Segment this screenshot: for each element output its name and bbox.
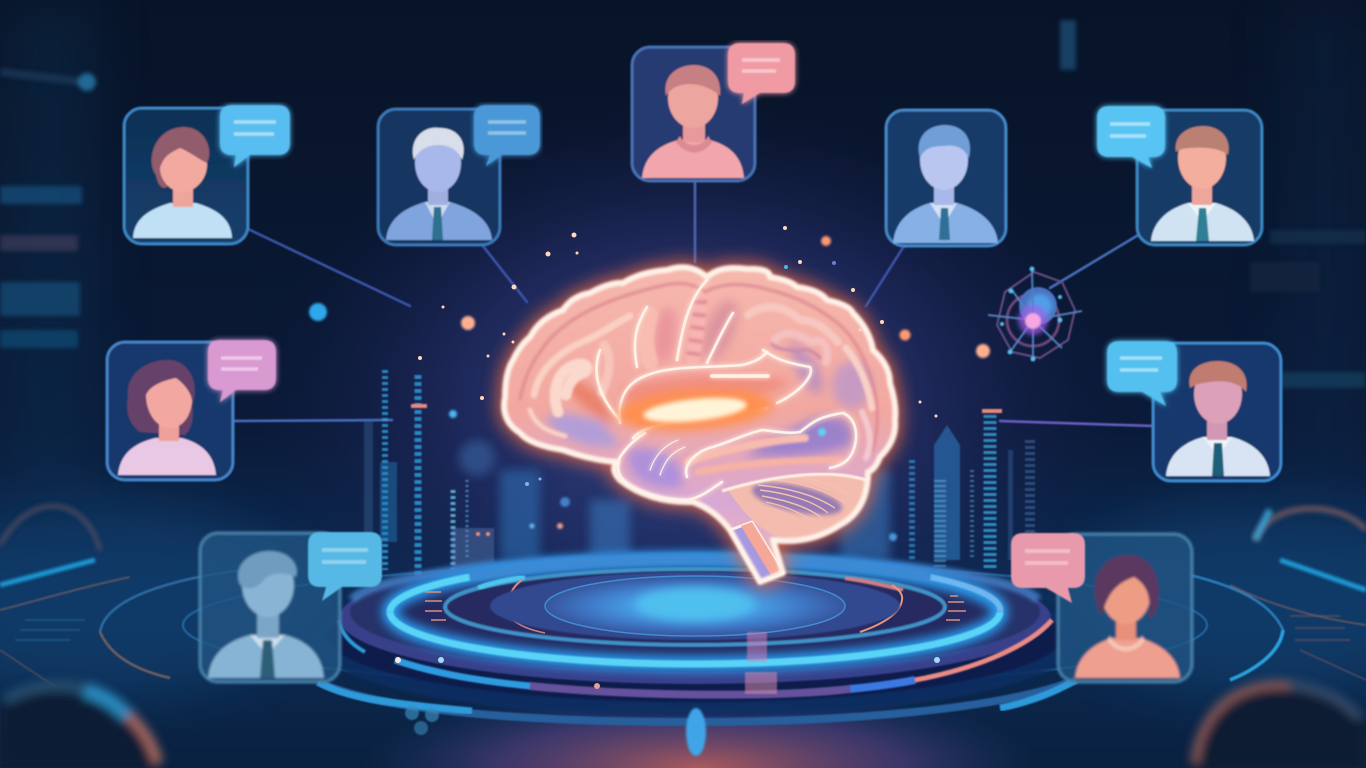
inner ring bbox=[445, 569, 945, 645]
person card 6: woman mid left bbox=[107, 340, 276, 480]
cerebellum striations bbox=[722, 474, 866, 539]
purple and coral shading bbox=[545, 295, 872, 488]
central bright core bbox=[616, 385, 774, 435]
person card 3: top center pink bbox=[632, 43, 795, 181]
speech bubble bbox=[474, 105, 540, 166]
person card 1: woman top left bbox=[124, 105, 290, 244]
speech bubble bbox=[1011, 533, 1085, 603]
person card 9: blurred woman bottom right bbox=[1011, 533, 1192, 682]
data skyline left bbox=[364, 370, 890, 590]
speech bubble bbox=[208, 340, 276, 402]
data skyline right bbox=[912, 409, 1030, 570]
floating particles bbox=[309, 226, 990, 541]
speech bubble bbox=[728, 43, 795, 104]
accent segments bbox=[338, 620, 1052, 695]
tick marks bbox=[425, 592, 966, 620]
foreground blurred corner shapes bbox=[0, 685, 1366, 768]
main glowing ring bbox=[390, 560, 1000, 664]
person card 7: man mid right bbox=[1107, 341, 1281, 481]
connector lines from cards to brain bbox=[234, 181, 1154, 426]
background decoration: blurred left and right interface bars bbox=[0, 20, 1366, 388]
background rings bbox=[0, 506, 1366, 690]
brain bbox=[504, 267, 895, 582]
speech bubble bbox=[220, 105, 290, 167]
person card 2: man with grey hair bbox=[378, 105, 540, 245]
speech bubble bbox=[1097, 106, 1165, 168]
cortex folds bbox=[530, 300, 872, 472]
pink light column bbox=[747, 632, 767, 662]
central holographic platform bbox=[310, 552, 1080, 756]
brain outer glow bbox=[504, 267, 895, 582]
person card 4: top right suit bbox=[886, 110, 1006, 246]
person card 8: blurred man bottom left bbox=[200, 532, 382, 682]
network node icon bbox=[988, 266, 1082, 362]
person card 5: top far right bbox=[1097, 106, 1262, 245]
outer lower arc bbox=[318, 680, 1076, 722]
brain outline bbox=[504, 267, 895, 582]
center disc bbox=[490, 572, 900, 640]
speech bubble bbox=[1107, 341, 1177, 406]
droplet indicators bbox=[686, 708, 706, 756]
inner contour band bbox=[520, 284, 877, 452]
brain body bbox=[504, 267, 895, 582]
bright sulci lines bbox=[596, 280, 856, 500]
speech bubble bbox=[308, 532, 382, 601]
brain stem bbox=[730, 522, 783, 582]
platform base bbox=[310, 562, 1080, 718]
